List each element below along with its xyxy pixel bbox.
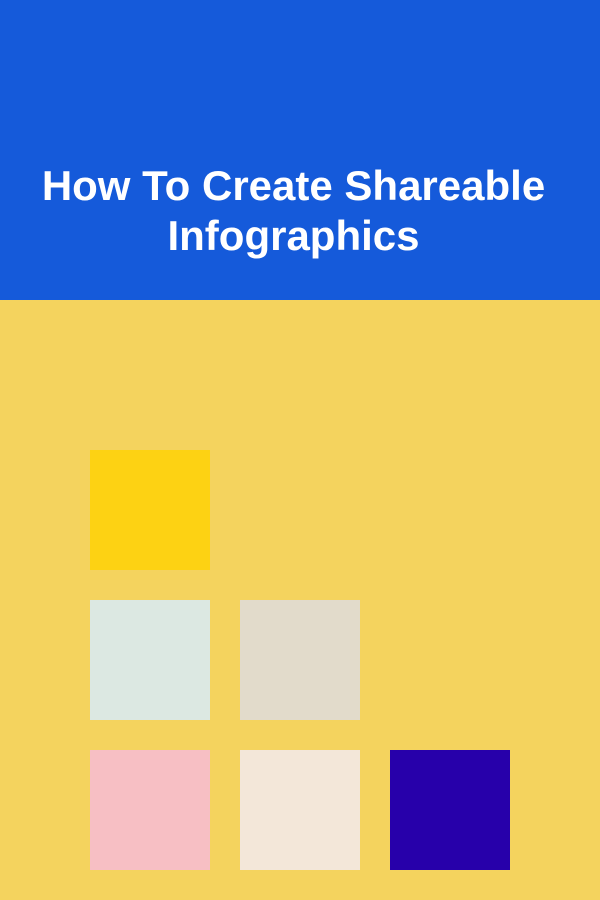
title: How To Create Shareable <box>42 162 545 209</box>
square: indigo <box>390 750 510 870</box>
title <box>42 162 545 259</box>
square: yellow <box>90 450 210 570</box>
square: beige <box>240 600 360 720</box>
header panel <box>0 0 600 300</box>
square: cream <box>240 750 360 870</box>
square: pink <box>90 750 210 870</box>
square: pale green <box>90 600 210 720</box>
title: Infographics <box>167 212 420 259</box>
